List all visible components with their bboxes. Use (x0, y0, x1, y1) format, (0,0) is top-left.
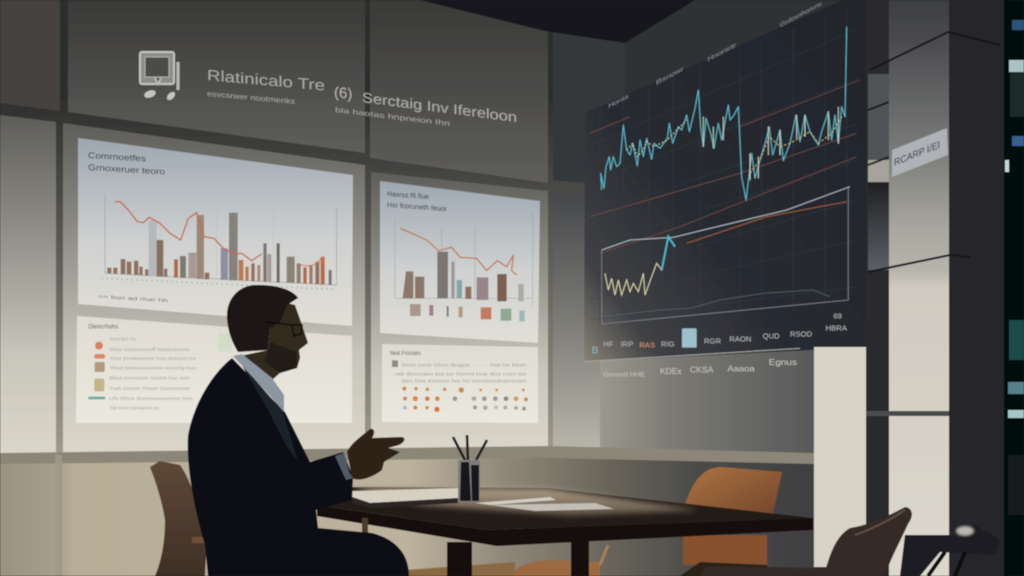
monitor footer labels: Egnus (769, 357, 797, 367)
wall strip lower (868, 183, 889, 270)
notebook and papers (352, 488, 614, 511)
chart card 2 heading: Haxrss f6 fiue (387, 191, 429, 201)
wall below screen (600, 340, 814, 453)
legend card 4 (382, 344, 538, 423)
monitor axis labels: QUD (763, 331, 780, 340)
monitor lower trends (602, 187, 850, 317)
title text: esvcsrwer nootmenks (207, 89, 295, 106)
chart card 1 heading: Comrnoetfes (88, 150, 146, 163)
legend card 3 list: Tbod Smtsoanneorw vornshp hox (109, 366, 197, 372)
pen holder (453, 435, 487, 502)
skirting band (0, 446, 814, 464)
table tan highlight (350, 487, 700, 516)
chart card 2 heading: Hxr fcoruneth feuor (387, 202, 448, 213)
legend card 3 list: Tbot Dnstoeerrer hos dotcom lnr (109, 356, 196, 362)
chart 1 footer notes: == bsn ad rhar hh (98, 294, 168, 304)
monitor axis labels: RIG (661, 340, 675, 349)
monitor footer labels (603, 357, 797, 379)
legend card 3 list: Tuet Dnsoh Trosm Donoronmt (109, 386, 190, 392)
monitor axis labels: RAS (639, 341, 655, 350)
table edge (317, 505, 813, 546)
monitor footer labels: Gvsncd HHE (603, 372, 646, 379)
monitor top labels: Bsnosr (656, 65, 684, 87)
foreground dark chair (700, 507, 912, 576)
monitor base line (583, 348, 800, 362)
monitor top trace (601, 27, 847, 200)
chart card 1 heading: Grnoxeruer teoro (88, 162, 165, 177)
legend card 4 icon grid: otlr Bnomeo tos tor hormt hos dox corn tor (395, 371, 527, 376)
jacket and trousers (188, 358, 409, 576)
chart 1 axes and bars (102, 193, 337, 289)
monitor lower chart frame (602, 187, 848, 324)
monitor axis labels (592, 311, 848, 356)
legend card 3 (76, 316, 352, 423)
foreground equipment (900, 525, 1000, 576)
chart card 2 (380, 181, 540, 343)
chart card 1 (78, 138, 353, 326)
legend card 3 list: Ufs Bhos Snormsaoerons hon (109, 396, 193, 402)
table leg back (571, 540, 589, 576)
title text: bla haotas hnpneion Ihn (335, 107, 450, 128)
wall panel gaps (0, 100, 600, 460)
title logo icon (140, 52, 178, 102)
chart card 1 heading (88, 150, 165, 177)
glasses (266, 322, 302, 336)
monitor footer labels: CKSA (690, 365, 714, 375)
legend card 4 icon grid: Neat Frouraes (390, 351, 421, 357)
table leg front (447, 542, 472, 576)
dark pillar gap (866, 0, 892, 576)
person silhouette (150, 285, 409, 576)
table (317, 487, 813, 576)
monitor footer labels: KDEx (660, 366, 683, 376)
legend card 4 icon grid: Dnot corst Ghos Ibogos ·· ·· ·· hos tor foron (402, 362, 527, 367)
raised hand (347, 429, 404, 480)
wall strip light (868, 160, 889, 182)
monitor axis labels: HBRA (826, 324, 848, 333)
monitor charts (583, 0, 860, 379)
chart 2 axes and bars (395, 212, 533, 321)
server rack (1004, 0, 1024, 576)
wainscot (0, 452, 814, 576)
monitor axis labels: 69 (833, 311, 842, 320)
legend card 4 icon grid: Blm Dos tmnerer hor ho tomnsroohoenrosm (402, 379, 527, 384)
monitor axis labels: RAON (729, 335, 751, 344)
monitor top labels: Horas (608, 93, 629, 110)
legend card 3 list (88, 323, 232, 412)
legend card 4 icon grid (390, 351, 528, 412)
monitor axis labels: RSOD (790, 330, 813, 339)
cream column (814, 347, 866, 567)
title text: Serctaig Inv Ifereloon (362, 89, 517, 125)
title text: (6) (334, 84, 352, 103)
table leg thin (362, 518, 368, 536)
pillar joint 2 (866, 411, 952, 416)
legend card 3 list: Snot 8s1 fcr (109, 337, 136, 343)
beard (265, 342, 297, 373)
shirt cuff (335, 453, 353, 480)
monitor top labels: Grdosnhoruns (780, 0, 822, 29)
legend card 3 list: Dlencrhuhs (88, 323, 119, 330)
brackets (868, 32, 1000, 272)
title text (207, 67, 517, 128)
monitor axis labels: HF (603, 340, 614, 349)
wall strip upper (868, 74, 889, 160)
neck and face (240, 303, 308, 380)
ceiling (420, 0, 695, 43)
monitor grid (588, 8, 858, 325)
monitor axis labels: RGR (704, 336, 721, 345)
left chair (150, 461, 287, 576)
hair (227, 285, 298, 352)
title text: Rlatinicalo Tre (207, 67, 325, 95)
monitor top labels (608, 0, 822, 110)
monitor axis labels: B (592, 345, 599, 356)
upper right wall (625, 0, 870, 150)
right wall monitor screen (583, 0, 867, 379)
monitor axis labels: IRP (621, 340, 633, 349)
back chair: tan leather (513, 467, 782, 576)
upper wall panels (0, 0, 625, 183)
wall sign (892, 128, 948, 177)
lapel highlight (240, 362, 298, 462)
monitor footer labels: Aaaoa (727, 364, 755, 374)
wall sign: RCARP I/EI (894, 140, 940, 169)
legend card 3 list: Bhos Dneonon Vsomt hoc nrin (109, 375, 190, 381)
legend card 3 list: Shos Somexoreoff Wposcenens (109, 347, 190, 353)
wainscot divider (55, 455, 62, 576)
monitor top labels: Hnorsrtr (708, 42, 737, 64)
dark column (949, 0, 1004, 576)
lower wall panels (0, 115, 600, 455)
chart 1 trend line (115, 202, 262, 261)
floor strip (405, 562, 515, 576)
legend card 3 list: Tbl hnst Deoamn so (109, 406, 160, 412)
shirt collar (233, 354, 284, 412)
chart card 2 heading (387, 191, 448, 213)
column right: cream pillar (889, 0, 950, 576)
chart 2 trend line (400, 228, 517, 275)
monitor reference lines (590, 80, 860, 253)
